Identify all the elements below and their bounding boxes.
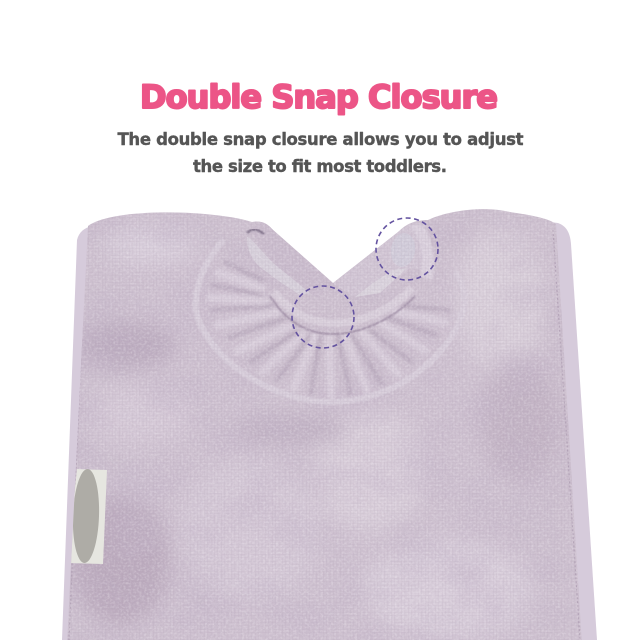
description text: the size to fit most toddlers. xyxy=(193,157,447,176)
neck lining: left xyxy=(247,237,310,295)
bib illustration xyxy=(50,200,597,640)
shoulder strap: left xyxy=(262,222,332,282)
care label xyxy=(71,469,107,564)
shoulder strap: right xyxy=(351,278,367,289)
description text: The double snap closure allows you to adjust xyxy=(118,130,524,149)
elastic gather line xyxy=(270,296,415,334)
snap button xyxy=(389,231,417,269)
fabric shading xyxy=(70,227,560,640)
right collar strap xyxy=(412,225,434,280)
description text xyxy=(118,130,524,176)
collar seam ring xyxy=(196,242,465,402)
snap highlight circle: lower xyxy=(292,286,354,348)
label oval logo xyxy=(73,469,100,563)
neck lining: right xyxy=(355,268,407,297)
snap highlight circle: upper xyxy=(376,218,438,280)
stitch lines xyxy=(69,230,580,640)
terry cloth body xyxy=(50,200,590,640)
bib binding trim: right xyxy=(550,222,597,640)
bib binding trim: left xyxy=(62,226,100,640)
fabric weave overlay xyxy=(50,200,590,640)
title: Double Snap Closure xyxy=(140,78,498,116)
strap shadow xyxy=(247,230,264,234)
collar pleats xyxy=(210,262,450,396)
